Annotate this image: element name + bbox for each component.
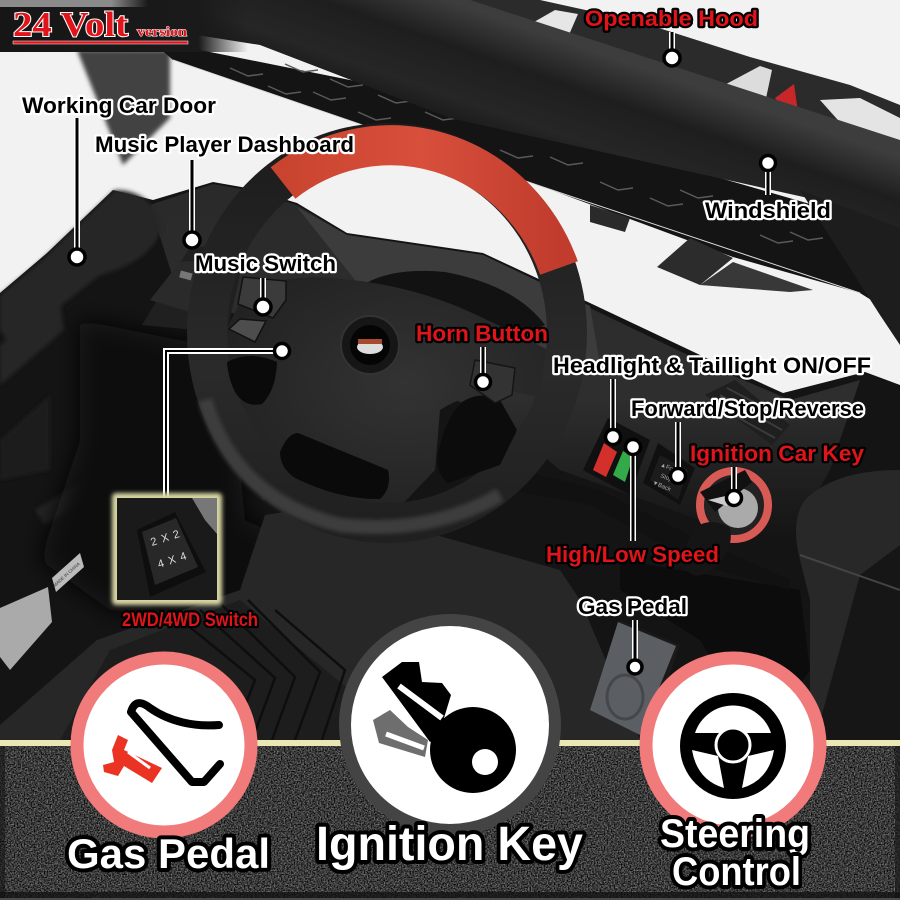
left windshield pillar (77, 50, 170, 165)
black footwell (40, 320, 290, 630)
callout: Ignition Car Key: Ignition Car Key (690, 441, 865, 466)
feature: Steering Control: Control (672, 850, 801, 894)
footer band (0, 740, 900, 900)
callout: Openable Hood: Openable Hood (585, 6, 758, 31)
windshield frame strip with vents (150, 40, 900, 318)
right pillar (800, 190, 900, 345)
callout: Music Player Dashboard: Music Player Dashboard (95, 132, 354, 157)
callout: Working Car Door (22, 93, 216, 265)
accelerator pedal plate (590, 620, 680, 737)
bottom spoke opening (280, 433, 389, 499)
callout: Gas Pedal (578, 594, 687, 674)
door armrest and door panel (0, 190, 162, 525)
forward stop reverse switch (643, 443, 695, 505)
sticker: warning label (0, 553, 84, 670)
callout: Horn Button: Horn Button (416, 321, 548, 346)
instrument cluster hood (345, 271, 545, 345)
feature: Gas Pedal: Gas Pedal (67, 830, 270, 877)
windshield top bar (145, 0, 900, 232)
icon: steering wheel (680, 693, 786, 799)
floor mat (0, 505, 640, 740)
dashboard body (0, 182, 900, 740)
callout: Music Switch: Music Switch (195, 251, 336, 276)
forward stop reverse switch: ▲Forw (659, 462, 680, 475)
callout: Ignition Car Key (690, 441, 865, 506)
right seat (796, 470, 900, 740)
forward stop reverse switch: Stop (659, 473, 674, 484)
steering wheel (205, 143, 567, 527)
lower dash lip (510, 470, 790, 590)
feature: Ignition Key (316, 620, 583, 871)
steering wheel hub (226, 277, 552, 512)
feature: Ignition Key: Ignition Key (316, 818, 583, 871)
forward stop reverse switch: ▼Back (651, 480, 672, 493)
callout: 2WD/4WD Switch with inset (112, 344, 290, 631)
callout: Music Player Dashboard (95, 132, 354, 248)
feature: Steering Control (646, 658, 820, 894)
callout: Openable Hood (585, 6, 758, 66)
24 Volt banner: 24 Volt (13, 5, 128, 44)
inset photo (117, 498, 217, 600)
callout: Working Car Door: Working Car Door (22, 93, 216, 118)
callout: Windshield (705, 156, 831, 223)
left spoke opening (227, 356, 277, 405)
hood with decals (450, 0, 900, 170)
callout: Headlight and Taillight switch: Headlight & Taillight ON/OFF (553, 353, 871, 378)
24 Volt banner: version (137, 25, 187, 40)
ignition ring and key (682, 470, 768, 576)
callout: 2WD/4WD Switch with inset: 2WD/4WD Switch (122, 610, 258, 631)
inset photo: 4 X 4 (156, 550, 189, 571)
callout: High/Low Speed (546, 440, 719, 567)
24 Volt banner (0, 0, 248, 52)
steering wheel rim sheen (205, 400, 500, 527)
callout: Forward/Stop/Reverse (631, 396, 864, 484)
sticker: warning label: MADE IN CHINA (52, 561, 81, 588)
music switch button (238, 277, 286, 318)
icon: ignition key (373, 662, 516, 793)
air vents (705, 380, 790, 445)
steering wheel logo (341, 316, 399, 374)
callout: Windshield: Windshield (705, 198, 831, 223)
feature: Gas Pedal (67, 658, 270, 877)
inset glow frame (112, 493, 222, 605)
right spoke opening (437, 395, 517, 483)
icon: gas pedal (103, 703, 220, 783)
steering wheel red section (283, 145, 559, 268)
inset photo: 2 X 2 (149, 528, 182, 549)
callout: High/Low Speed: High/Low Speed (546, 542, 719, 567)
callout: Music Switch (195, 251, 336, 315)
music player dashboard panel (142, 240, 240, 340)
pocket under dashboard (620, 560, 810, 740)
horn button (470, 360, 515, 403)
light and speed rocker switches (583, 418, 650, 495)
steering wheel rim (207, 143, 567, 523)
callout: Forward/Stop/Reverse: Forward/Stop/Reverse (631, 396, 864, 421)
callout: Horn Button (416, 321, 548, 390)
callout: Gas Pedal: Gas Pedal (578, 594, 687, 619)
volume button (229, 319, 266, 342)
feature: Steering Control: Steering (660, 812, 810, 856)
callout: Headlight and Taillight switch (553, 353, 871, 444)
